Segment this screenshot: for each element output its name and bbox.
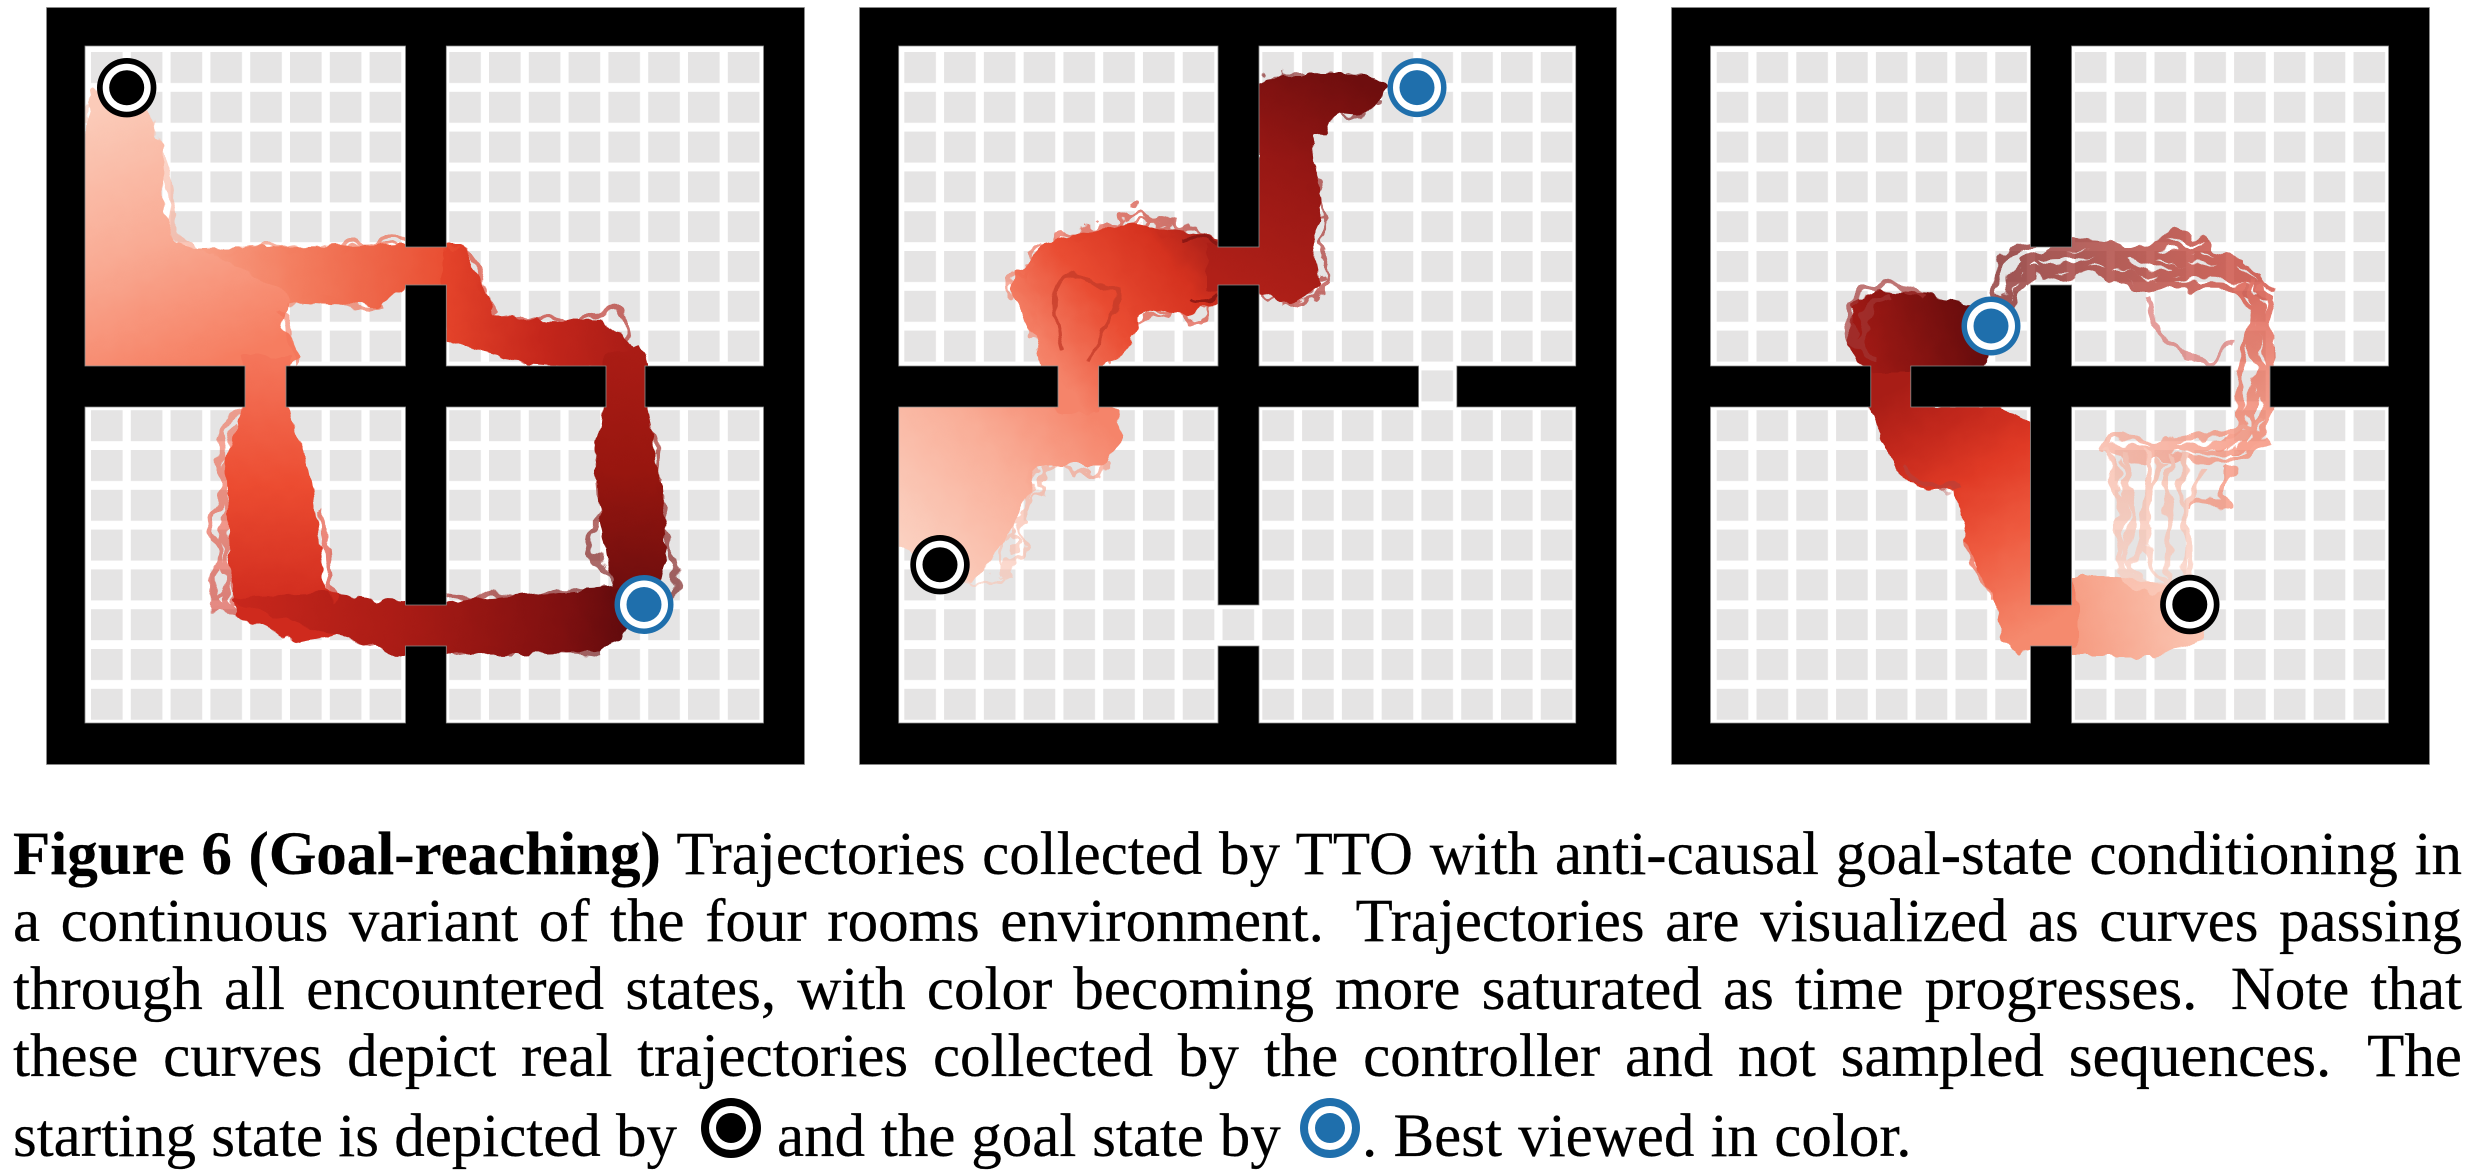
caption line 2: a continuous variant of the four rooms environment. Trajectories are visualized as curves passing bbox=[13, 888, 2462, 955]
marker: goal state bbox=[1962, 296, 2020, 356]
rooms floor grid bbox=[1710, 46, 2388, 723]
walls bbox=[860, 8, 1616, 764]
darker inner strands bbox=[1054, 237, 1218, 362]
caption line 3: through all encountered states, with color becoming more saturated as time progresses. Note that bbox=[13, 956, 2462, 1023]
rooms floor grid bbox=[85, 46, 764, 723]
figure: three four-rooms trajectory panels bbox=[46, 7, 2430, 765]
walls bbox=[46, 8, 804, 764]
trajectory bundle: red curves through two doors bbox=[898, 76, 1386, 585]
marker: start state bbox=[910, 535, 970, 594]
marker: goal state bbox=[614, 575, 674, 634]
rooms floor grid bbox=[899, 46, 1576, 723]
marker: start state bbox=[2160, 575, 2220, 634]
caption line 5 start: starting state is depicted by bbox=[13, 1103, 677, 1170]
marker: start state bbox=[97, 58, 156, 117]
caption line 1 with bold figure title: Figure 6 (Goal-reaching) Trajectories collected by TTO with anti-causal goal-state conditioning in bbox=[13, 821, 2462, 888]
caption text block bbox=[13, 821, 2462, 1170]
walls bbox=[1672, 8, 2430, 764]
marker: goal state bbox=[1388, 58, 1446, 117]
trajectory bundle: dense route and sparse route bbox=[1850, 236, 2273, 654]
panel: trajectories from bottom-left room to top-right goal bbox=[860, 8, 1616, 764]
panel: trajectories from bottom-right room to top-left goal bbox=[1672, 8, 2430, 764]
icon: goal state legend bbox=[1300, 1098, 1360, 1158]
icon: start state legend bbox=[701, 1098, 761, 1158]
caption line 5 end: . Best viewed in color. bbox=[1362, 1103, 1912, 1170]
caption line 4: these curves depict real trajectories collected by the controller and not sampled sequences. The bbox=[13, 1023, 2462, 1090]
caption line 5 middle: and the goal state by bbox=[777, 1103, 1281, 1170]
panel: trajectories from top-left room to bottom-right goal bbox=[46, 8, 804, 764]
trajectory bundle: red curves around the four rooms bbox=[85, 90, 677, 654]
